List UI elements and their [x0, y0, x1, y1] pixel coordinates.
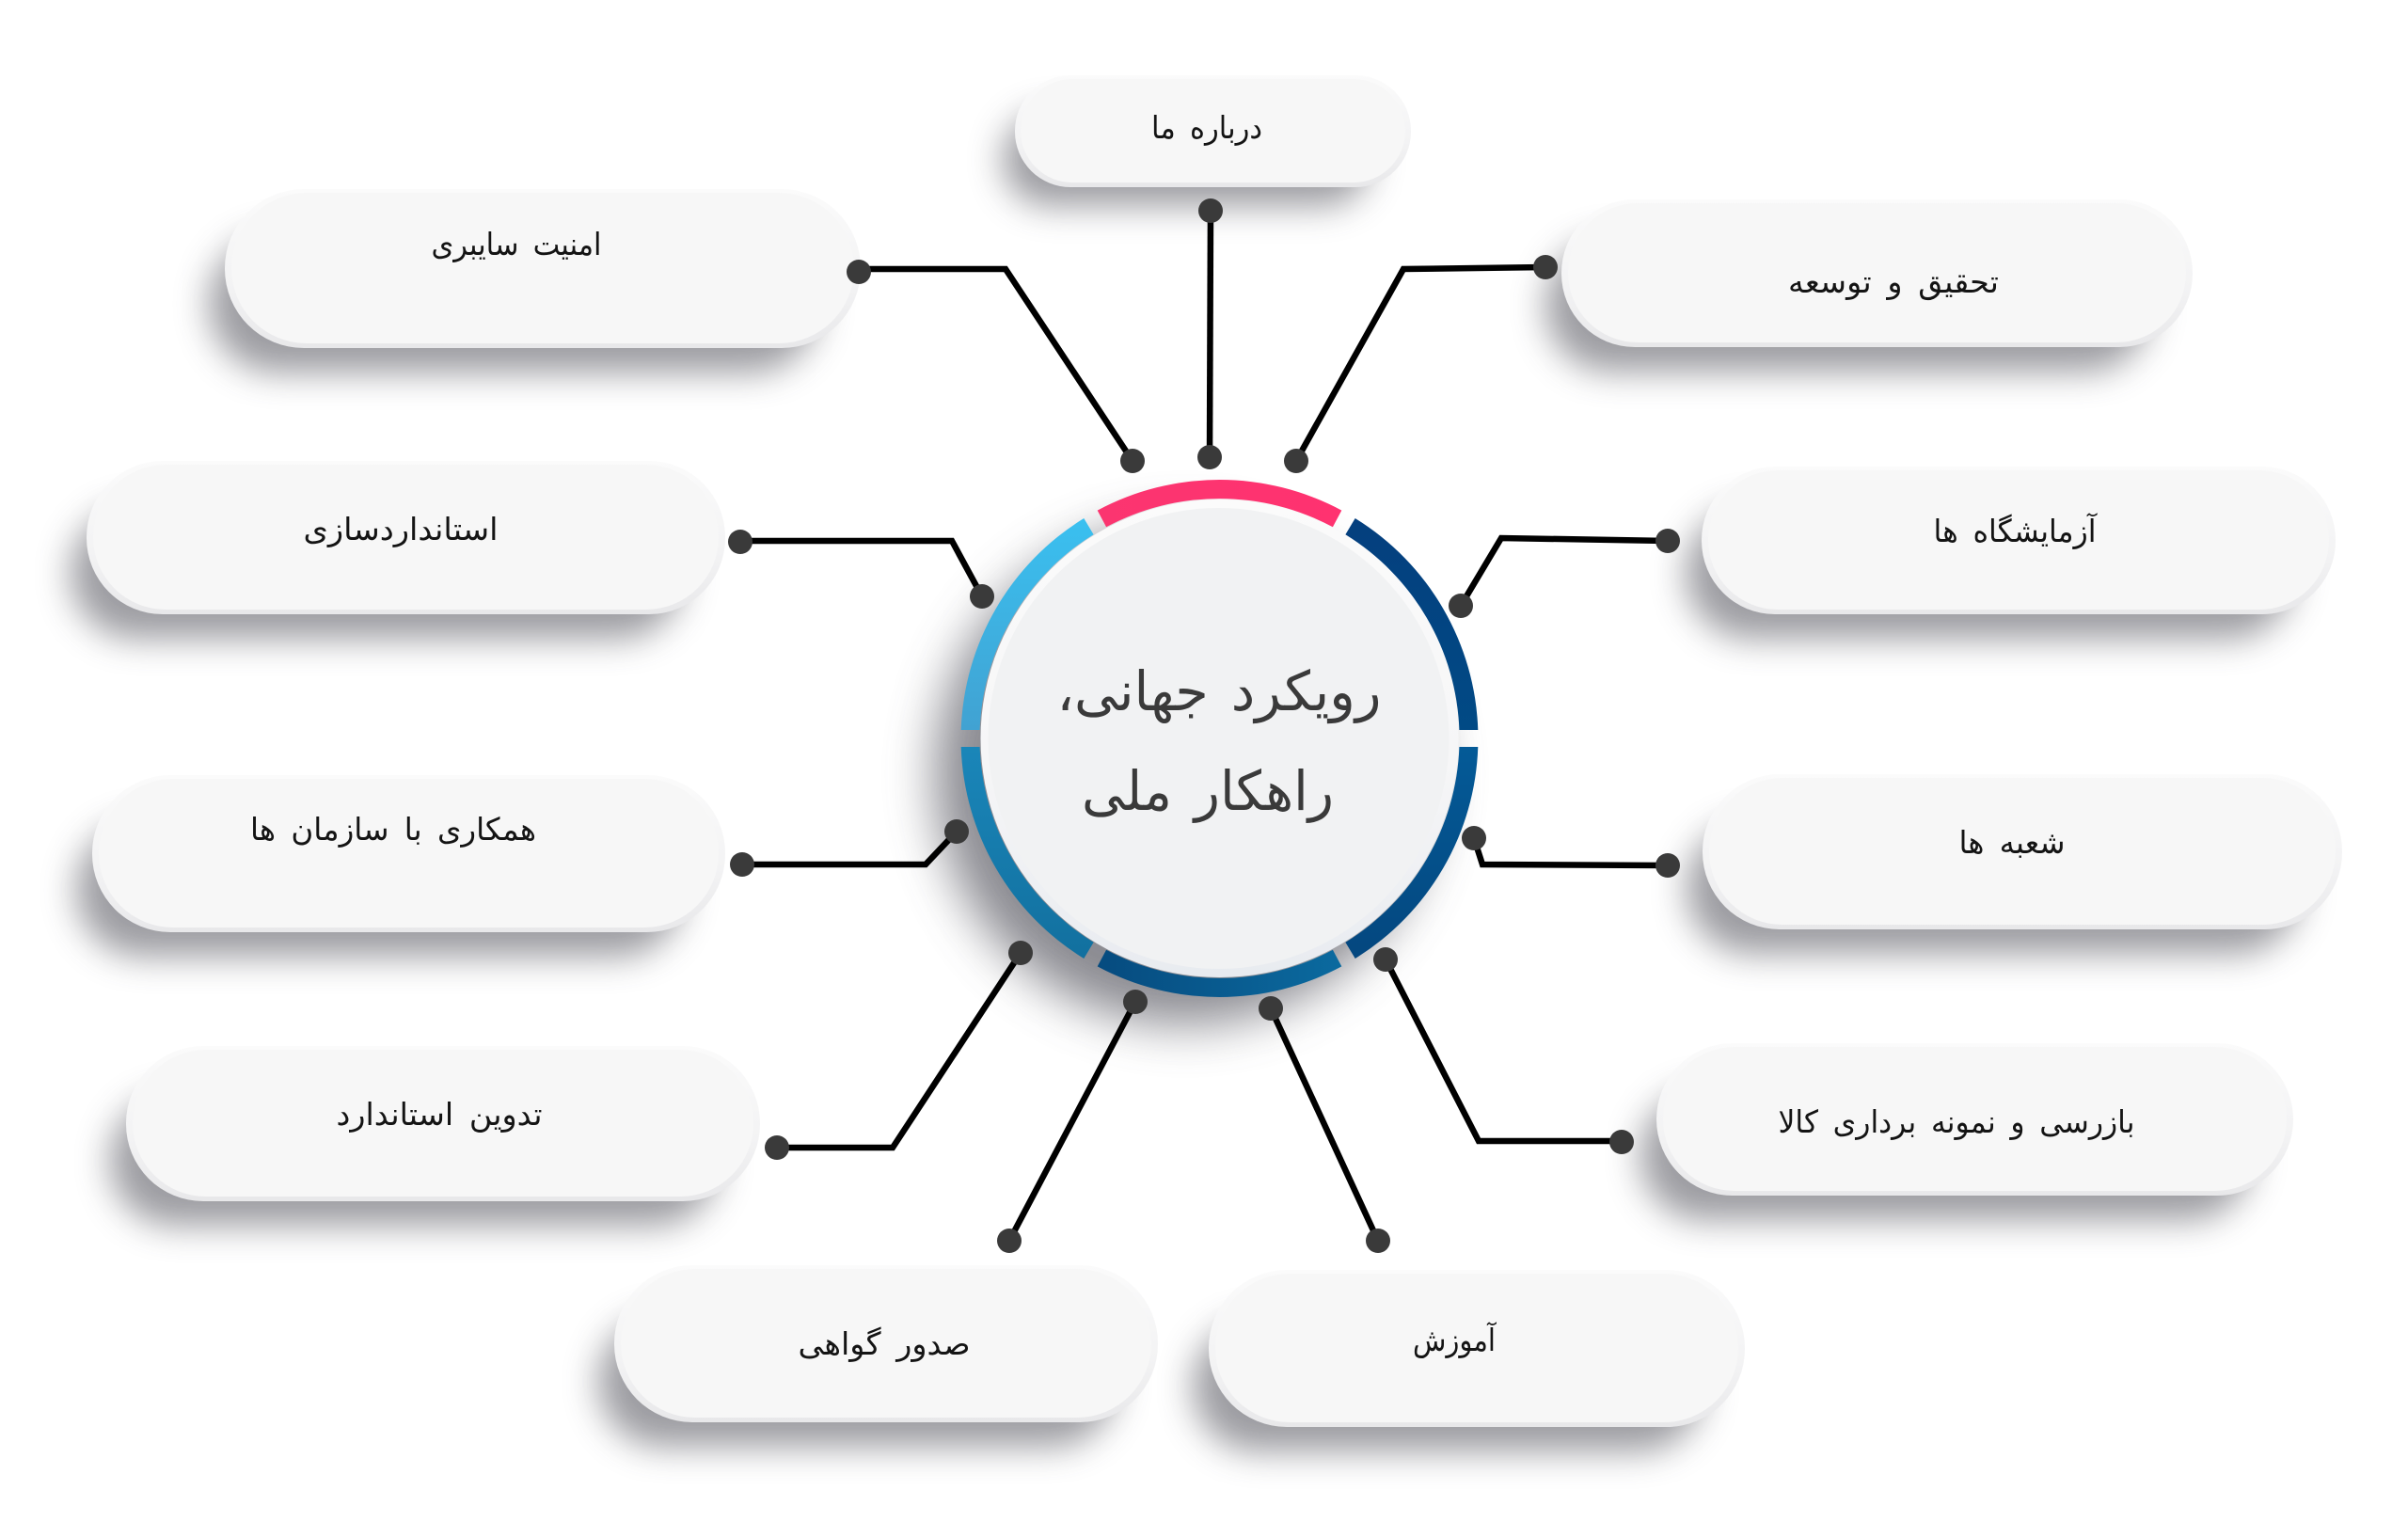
- pill: collaboration with organizations: [76, 775, 725, 957]
- pill: laboratories: [1686, 467, 2336, 639]
- connector: laboratories: [1449, 529, 1680, 618]
- ring: upper right segment: [1345, 518, 1478, 730]
- pill: collaboration with organizations: همکاری با سازمان ها: [250, 811, 536, 848]
- central circle: [935, 480, 1478, 1024]
- connector: inspection: [1373, 947, 1634, 1154]
- connector: standardization: [728, 530, 994, 609]
- connector: training: [1259, 996, 1390, 1253]
- pill: certificate issuance: صدور گواهی: [798, 1325, 971, 1362]
- pill: branches: [1687, 774, 2342, 954]
- ring: bottom segment: [1098, 950, 1341, 997]
- connector: drafting standards: [765, 941, 1033, 1160]
- pill: research and development: تحقیق و توسعه: [1788, 263, 1999, 301]
- pill: research and development: [1545, 199, 2193, 372]
- pill: standardization: [71, 461, 725, 639]
- circle shadow: [935, 524, 1435, 1024]
- pill: inspection and sampling: [1640, 1043, 2293, 1220]
- connector: branches: [1462, 826, 1680, 878]
- central circle: راهکار ملی: [1082, 759, 1334, 823]
- pill: standardization: استانداردسازی: [303, 511, 499, 547]
- pill: inspection and sampling: بازرسی و نمونه برداری کالا: [1778, 1103, 2135, 1140]
- pill: about us: [1003, 75, 1411, 206]
- circle title: رویکرد جهانی،: [1057, 659, 1381, 724]
- pill: training: آموزش: [1413, 1322, 1497, 1358]
- connector: collaboration: [730, 819, 969, 877]
- connector: research and development: [1284, 255, 1558, 473]
- ring: lower left segment: [961, 747, 1094, 959]
- pill: training: [1193, 1270, 1745, 1451]
- pill: laboratories: آزمایشگاه ها: [1934, 513, 2098, 549]
- pill: cyber security: امنیت سایبری: [431, 226, 602, 262]
- ring: top pink segment: [1098, 480, 1341, 527]
- pill: cyber security: [209, 189, 861, 373]
- pill: drafting standards: تدوین استاندارد: [337, 1096, 542, 1133]
- connector: about us: [1197, 198, 1223, 469]
- circle disc: [980, 499, 1458, 977]
- pill: branches: شعبه ها: [1958, 824, 2066, 861]
- pill: certificate issuance: [598, 1265, 1158, 1447]
- ring: upper left segment: [961, 518, 1094, 730]
- pill: drafting standards: [110, 1046, 760, 1226]
- pill: about us: درباره ما: [1151, 109, 1262, 146]
- ring: lower right segment: [1345, 747, 1478, 959]
- connector: cyber security: [847, 260, 1145, 473]
- connector: certificate issuance: [997, 990, 1148, 1253]
